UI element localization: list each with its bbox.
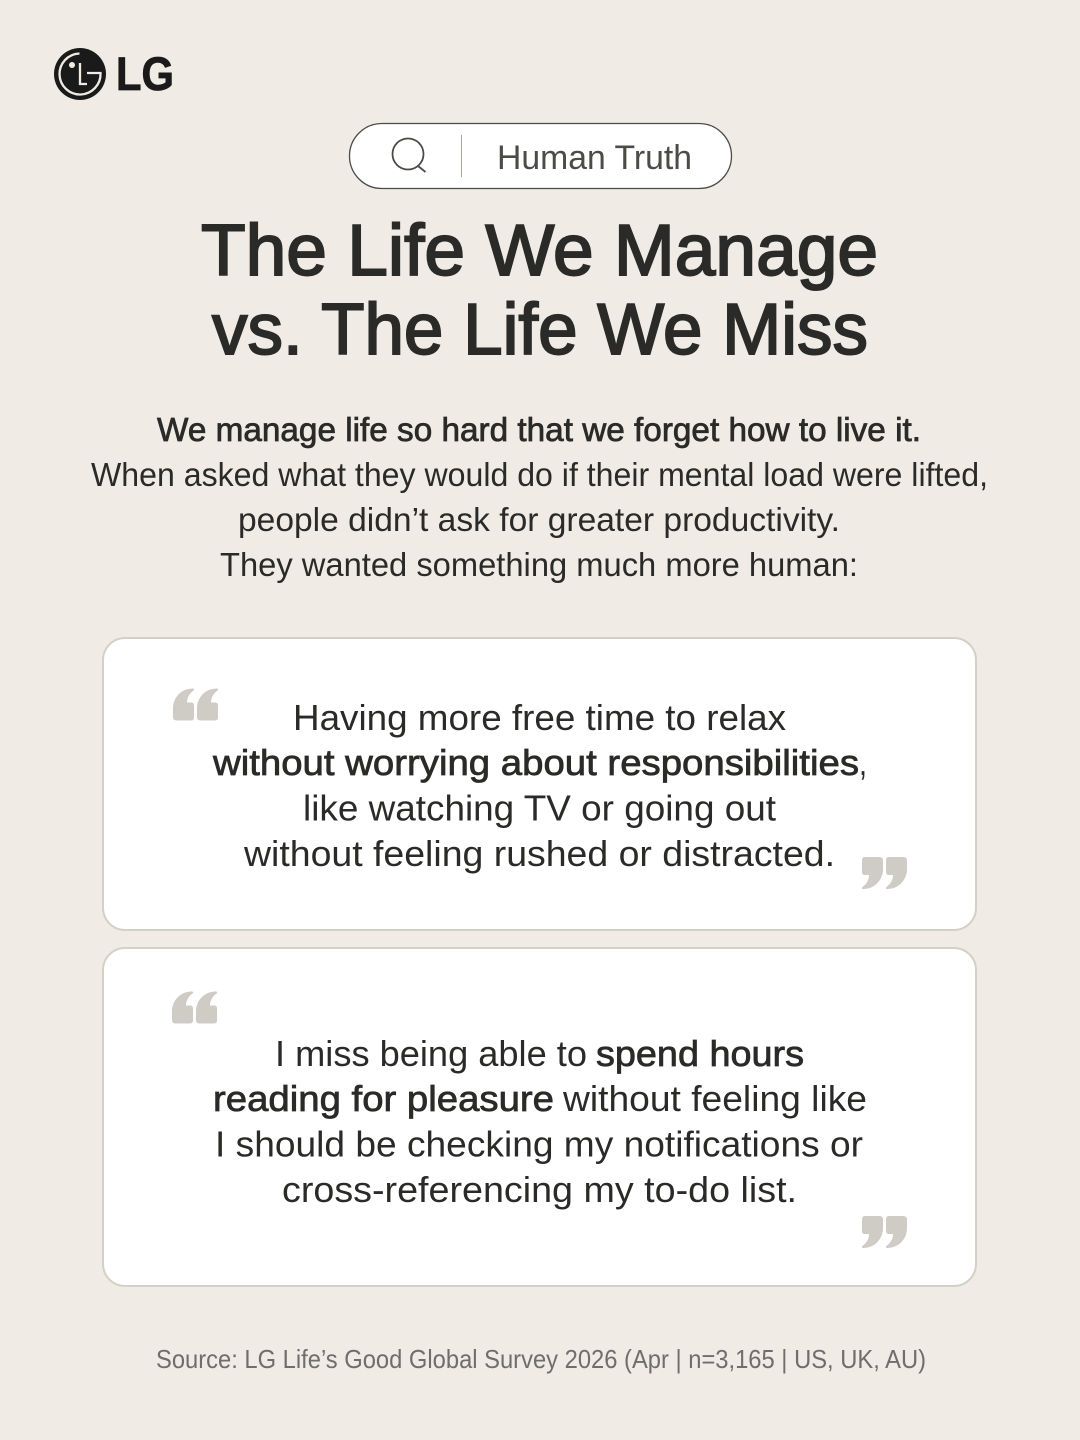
quote 2 text [213, 1033, 867, 1210]
quote 2 text: I miss being able to [275, 1033, 587, 1074]
title [201, 211, 878, 370]
quote 1 text: like watching TV or going out [303, 788, 776, 828]
icon: closing quotation mark [862, 1216, 907, 1248]
icon: LG face [54, 48, 106, 100]
intro text: people didn’t ask for greater productivity. [238, 501, 840, 538]
title: The Life We Manage [201, 211, 878, 291]
panel: quote card 1 [103, 638, 976, 930]
quote 2 text: spend hours [596, 1033, 804, 1074]
quote 2 text: I should be checking my notifications or [215, 1124, 863, 1164]
icon: opening quotation mark [172, 992, 217, 1024]
intro text: When asked what they would do if their mental load were lifted, [91, 456, 988, 493]
quote 1 text: without worrying about responsibilities [212, 742, 859, 783]
pill label: Human Truth [497, 139, 692, 177]
logo wordmark: LG [116, 47, 174, 100]
quote 1 text: without feeling rushed or distracted. [243, 833, 835, 874]
logo: LG [54, 47, 174, 100]
icon: closing quotation mark [862, 857, 907, 889]
panel: quote card 2 [103, 948, 976, 1286]
intro text: They wanted something much more human: [220, 546, 858, 583]
source note: Source: LG Life’s Good Global Survey 2026 (Apr | n=3,165 | US, UK, AU) [156, 1344, 926, 1374]
quote 2 text: without feeling like [562, 1078, 867, 1119]
search pill: Human Truth [350, 124, 732, 188]
quote 2 text: reading for pleasure [213, 1078, 554, 1119]
quote 2 text: cross-referencing my to-do list. [282, 1169, 797, 1210]
quote 1 text [212, 697, 867, 874]
icon: magnifying glass [392, 138, 426, 172]
quote 1 text: , [859, 742, 867, 783]
intro text [91, 411, 988, 583]
icon: opening quotation mark [173, 688, 218, 720]
intro text: We manage life so hard that we forget how to live it. [157, 411, 921, 448]
quote 1 text: Having more free time to relax [293, 697, 786, 738]
title: vs. The Life We Miss [212, 290, 868, 370]
